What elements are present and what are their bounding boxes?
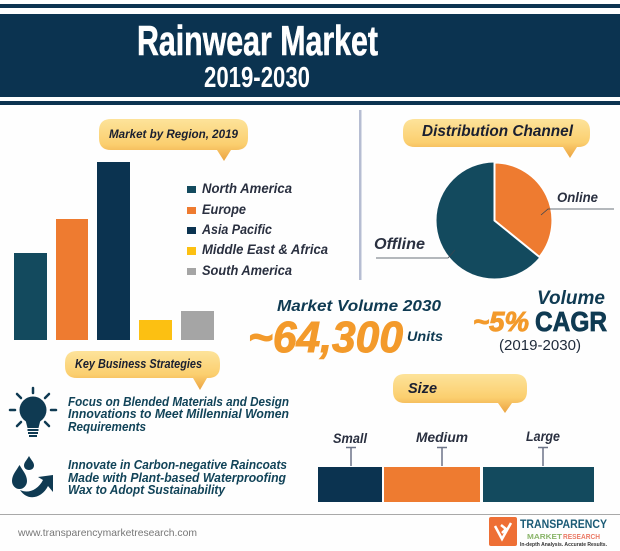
heading: distribution channel: Distribution Channel: [422, 123, 574, 140]
stat: volume CAGR: [473, 288, 607, 354]
strategy text 2: [68, 458, 287, 497]
label: online: [541, 190, 614, 215]
heading: size: [393, 374, 527, 413]
size labels: Large: [526, 429, 560, 444]
legend: Middle East & Africa: [202, 242, 328, 257]
pie chart: [436, 162, 552, 278]
stat: volume CAGR: Volume: [537, 288, 605, 309]
panel: size: [318, 374, 594, 502]
heading: market by region: [99, 119, 248, 161]
icon: water drops and arrow: [12, 456, 53, 497]
panel: key business strategies: [10, 351, 289, 497]
heading: market by region: Market by Region, 2019: [109, 127, 238, 141]
label: offline: [374, 236, 455, 258]
strategy text 1: [68, 395, 289, 434]
stat: volume CAGR: CAGR: [535, 306, 607, 337]
size labels: Small: [333, 431, 367, 446]
subtitle: 2019-2030: [204, 62, 310, 94]
strategy text 1: Requirements: [68, 420, 146, 434]
stat: market volume: ~64,300: [248, 313, 404, 362]
size labels: [333, 429, 560, 466]
stat: market volume: Units: [407, 328, 443, 344]
heading: key business strategies: [65, 351, 220, 390]
stat: market volume: [248, 298, 443, 362]
legend: North America: [202, 181, 292, 196]
logo: MARKET: [527, 534, 563, 541]
segmented size bar: [318, 467, 594, 502]
strategy text 1: Focus on Blended Materials and Design: [68, 395, 289, 409]
stat: volume CAGR: ~5%: [473, 306, 529, 337]
header band: [0, 4, 620, 105]
legend: Asia Pacific: [201, 222, 272, 237]
strategy text 2: Innovate in Carbon-negative Raincoats: [68, 458, 287, 472]
heading: distribution channel: [403, 119, 590, 158]
strategy text 1: Innovations to Meet Millennial Women: [68, 407, 289, 421]
vertical divider: [359, 110, 362, 280]
label: offline: Offline: [374, 236, 425, 253]
logo: In-depth Analysis. Accurate Results.: [520, 542, 607, 548]
panel: market by region: [14, 119, 328, 340]
heading: key business strategies: Key Business Strategies: [75, 357, 202, 371]
footer rule: [0, 514, 620, 515]
logo: [489, 517, 607, 548]
legend: [187, 181, 328, 278]
logo: TRANSPARENCY: [520, 517, 607, 531]
icon: light bulb: [10, 388, 56, 437]
logo: RESEARCH: [563, 534, 600, 541]
title: Rainwear Market: [137, 17, 378, 64]
stat: volume CAGR: (2019-2030): [499, 338, 581, 354]
panel: distribution channel: [374, 119, 614, 278]
legend: Europe: [202, 202, 246, 217]
footer url: www.transparencymarketresearch.com: [17, 527, 197, 539]
size labels: Medium: [416, 430, 468, 445]
bar chart: [14, 162, 214, 340]
label: online: Online: [557, 190, 598, 205]
stat: market volume: Market Volume 2030: [277, 298, 441, 315]
heading: size: Size: [408, 380, 437, 397]
legend: South America: [202, 263, 292, 278]
strategy text 2: Made with Plant-based Waterproofing: [68, 471, 286, 485]
strategy text 2: Wax to Adopt Sustainability: [68, 483, 226, 497]
